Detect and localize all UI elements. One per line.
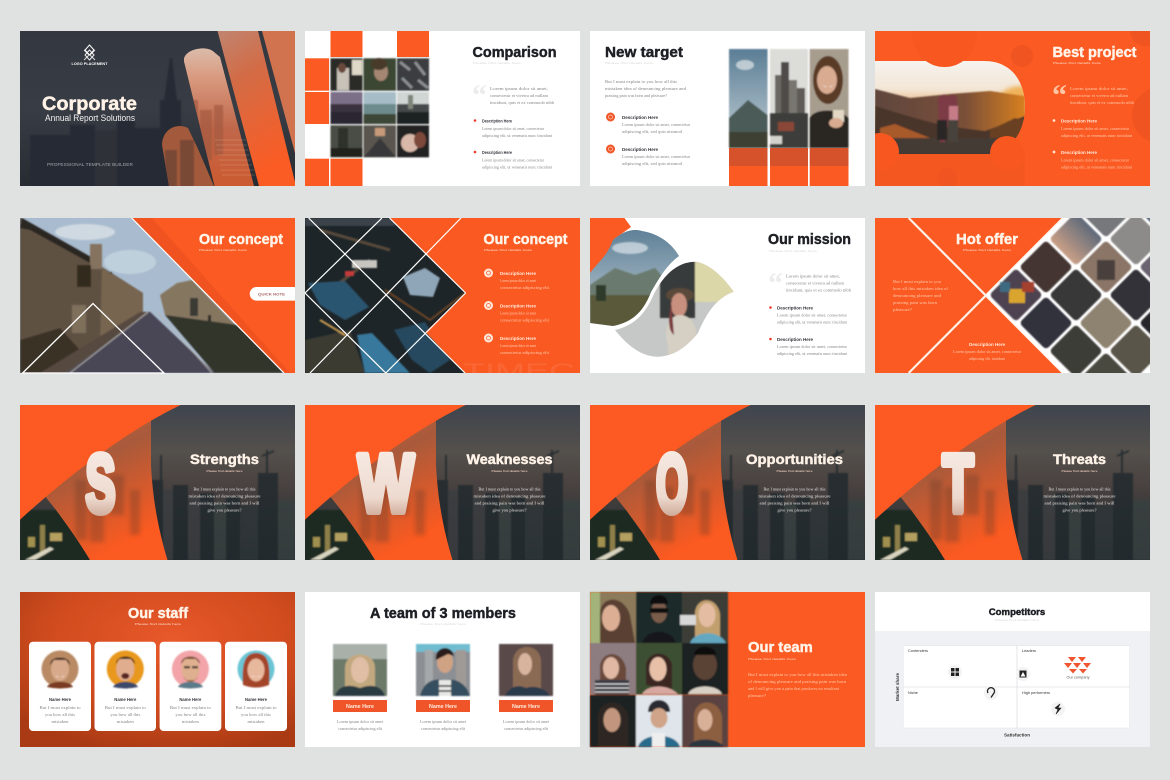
quote text: consectetur et viverra ad nullam — [1070, 93, 1128, 98]
subheading: Please find details here — [769, 249, 818, 253]
quote text: Lorem ipsum dolor sit amet, — [1070, 86, 1128, 92]
slide background — [20, 592, 295, 747]
paragraph: But I must explain to you how all this mistaken idea — [748, 672, 847, 677]
quote text: tincidunt, quis et ex commodo nibh — [786, 288, 852, 294]
paragraph — [758, 486, 830, 512]
slide art — [305, 405, 580, 560]
village street photo — [20, 218, 295, 373]
heading: Corporate: Corporate — [42, 94, 137, 115]
staff card 3: mistaken — [182, 719, 200, 724]
subheading: Please find details here — [963, 248, 1012, 252]
description item 1: Description Here — [777, 306, 814, 310]
description item 1 — [769, 306, 848, 326]
paragraph — [748, 672, 847, 698]
paragraph — [474, 486, 546, 512]
photo strip: woman with cup — [810, 49, 848, 148]
description item 1 with icon — [484, 268, 550, 290]
staff card 3: you how all this — [175, 712, 206, 717]
orange squares — [305, 31, 429, 186]
icon: high performer logo — [1051, 702, 1065, 716]
diamond photo mosaic — [986, 218, 1150, 373]
description item 2 with icon: Lorem ipsum dolor sit amet — [500, 310, 537, 316]
slide background — [590, 218, 865, 373]
team photo grid — [590, 592, 728, 747]
panel: Weaknesses slide — [305, 405, 580, 560]
paragraph: give you pleasure? — [1062, 508, 1096, 512]
quote text — [1070, 86, 1135, 106]
button: quick note — [250, 287, 295, 301]
icon: our company logo — [1064, 657, 1091, 674]
logo placement label: LOGO PLACEMENT — [72, 62, 108, 66]
panel: Our team slide — [590, 592, 865, 747]
description item 3 with icon: consectetur adipiscing elit — [500, 350, 550, 355]
member 1: consectetur adipiscing elit — [338, 726, 383, 731]
subheading: Please find details here — [135, 622, 181, 626]
description item 2: Description Here — [1061, 150, 1098, 155]
panel: New target slide — [590, 31, 865, 186]
our company label: Our company — [1066, 676, 1090, 680]
description item 2 with icon: Lorem ipsum dolor sit amet, consectetur — [622, 154, 690, 160]
paragraph — [188, 486, 260, 512]
paragraph: denouncing pleasure and — [893, 293, 942, 298]
paragraph — [605, 79, 687, 98]
staff card 4: you how all this — [241, 712, 271, 717]
panel: Corporate cover slide — [20, 31, 295, 190]
heading: Our mission — [768, 231, 851, 248]
quadrant labels: Contenders — [908, 649, 928, 653]
description item 2: adipiscing elit, ut venenatis nunc tincidunt — [777, 351, 848, 357]
quadrant labels: Niche — [908, 691, 918, 695]
description item 1: adipiscing elit, ut venenatis nunc tincidunt — [777, 320, 848, 326]
paragraph: and praising pain was born and I will — [190, 500, 260, 506]
header band — [875, 592, 1150, 631]
subheading: Please find details here — [473, 61, 522, 65]
staff card 1 — [29, 642, 91, 731]
aerial photo — [305, 218, 470, 373]
member 2: Name Here — [429, 704, 457, 710]
subheading: Please find details here — [206, 469, 243, 473]
photo strip: mountain — [729, 49, 768, 148]
panel: Our mission slide — [590, 218, 865, 373]
subheading: Please find details here — [420, 622, 466, 626]
staff card 4: mistaken — [248, 719, 265, 724]
icon: leader logo — [1016, 667, 1030, 681]
paragraph: praising pain was born — [893, 300, 938, 305]
member 3 — [499, 644, 553, 731]
panel: Strengths slide — [20, 405, 295, 560]
paragraph: But I must explain to you — [893, 279, 942, 284]
icon: logo mark — [84, 45, 95, 60]
heading: Weaknesses — [466, 452, 552, 467]
description item 1 — [474, 118, 553, 139]
member 3: Lorem ipsum dolor sit amet — [503, 719, 550, 724]
subheading: Please find details here — [605, 61, 654, 65]
panel: Opportunities slide — [590, 405, 865, 560]
panel: Our concept slide with village — [20, 218, 295, 373]
big letter T: T — [942, 438, 974, 530]
orange overlays — [729, 148, 848, 186]
paragraph: But I must explain to you how all this — [1048, 486, 1111, 492]
staff card 1: mistaken — [52, 719, 69, 724]
staff card 2 — [94, 642, 156, 731]
paragraph: how all this mistaken idea of — [893, 286, 948, 291]
panel: Our staff slide — [20, 592, 295, 747]
description item 2 with icon: Description Here — [500, 304, 537, 308]
description item 1: adipiscing elit, ut venenatis nunc tincidunt — [1061, 133, 1133, 139]
description item 3 with icon: Description Here — [500, 336, 537, 341]
subheading: Please find details here — [199, 248, 248, 252]
description item 3 with icon — [484, 334, 550, 355]
quadrant chart — [903, 646, 1130, 728]
paragraph — [893, 279, 948, 312]
heading: Opportunities — [746, 452, 843, 467]
slide background — [875, 631, 1150, 747]
staff card 2: Name Here — [114, 697, 137, 702]
slide background — [590, 31, 865, 186]
paragraph — [1044, 486, 1116, 512]
photo strip: city — [770, 49, 808, 148]
x axis label: Satisfaction — [1004, 732, 1030, 738]
paragraph: and praising pain was born and I will — [1044, 500, 1115, 506]
white diamond lines — [305, 218, 466, 373]
heading: Hot offer — [956, 231, 1018, 248]
panel: Our concept slide with aerial city — [305, 218, 580, 383]
description item 2: Description Here — [482, 150, 512, 155]
subheading: Please find details here — [748, 657, 797, 661]
description item 2: Lorem ipsum dolor sit amet, consectetur — [1061, 158, 1129, 164]
description item 1 — [1053, 118, 1133, 139]
paragraph: and praising pain was born and I will — [760, 500, 830, 506]
member 2 — [416, 644, 470, 731]
subheading: Please find details here — [1062, 469, 1098, 473]
slide background — [305, 218, 580, 373]
heading: Competitors — [989, 607, 1045, 618]
description item 2 with icon: adipiscing elit, sed quis nisimod — [622, 161, 683, 167]
white X lines — [909, 218, 1063, 373]
paragraph: But I must explain to you how all this — [764, 486, 826, 492]
sunset couple photo — [875, 61, 1025, 154]
paragraph: of denouncing pleasure and praising pain was born — [748, 679, 847, 684]
heading: Our team — [748, 639, 813, 656]
icon: contender logo — [948, 665, 962, 679]
description item 2 — [769, 337, 848, 357]
white triangle outline — [23, 304, 164, 373]
description item 1 with icon: Lorem ipsum dolor sit amet, consectetur — [622, 122, 690, 128]
description: Description Here — [969, 342, 1006, 347]
heading: New target — [605, 44, 683, 61]
description item 3 with icon: Lorem ipsum dolor sit amet — [500, 343, 537, 348]
staff card 1: you how all this — [45, 712, 75, 717]
cover background — [20, 31, 295, 190]
tagline: PROFESSIONAL TEMPLATE BUILDER — [47, 162, 134, 168]
slide art — [590, 405, 865, 560]
description item 1 with icon — [606, 112, 690, 135]
quote text — [490, 86, 555, 106]
heading: A team of 3 members — [370, 605, 516, 622]
subheading: Annual Report Solutions — [45, 113, 135, 123]
subheading: Please find details here — [492, 469, 528, 473]
quote icon: “ — [768, 267, 783, 300]
paragraph: give you pleasure? — [492, 508, 526, 512]
heading: Comparison — [472, 44, 556, 61]
button: quick note: QUICK NOTE — [258, 292, 286, 296]
description: Lorem ipsum dolor sit amet, consectetur — [953, 349, 1021, 355]
panel: Comparison slide — [305, 31, 580, 186]
staff card 2: mistaken — [117, 719, 135, 724]
heading: Our concept — [199, 231, 283, 248]
description item 2 with icon: Description Here — [622, 147, 659, 152]
paragraph: mistaken idea of denouncing pleasure — [474, 494, 546, 498]
panel: Team of 3 members slide — [305, 592, 580, 747]
description item 2 with icon — [484, 301, 550, 322]
member 1 — [333, 644, 387, 731]
paragraph: But I must explain to you how all this — [478, 486, 541, 492]
quadrant labels: Leaders — [1022, 649, 1036, 653]
y axis label: Market share — [895, 673, 900, 701]
paragraph: mistaken idea of denouncing pleasure — [758, 494, 830, 498]
description item 1: Description Here — [1061, 118, 1098, 124]
description item 1 with icon: adipiscing elit, sed quis nisimod — [622, 129, 683, 135]
paragraph: mistaken idea of denouncing pleasure — [1044, 494, 1116, 498]
paragraph: give you pleasure? — [778, 508, 812, 512]
staff card 3: Name Here — [179, 697, 202, 702]
paragraph: But I must explain to you how all this — [194, 486, 256, 492]
description item 2 — [1053, 150, 1133, 170]
description item 2: Lorem ipsum dolor sit amet, consectetur — [482, 158, 544, 164]
woman photo blob — [615, 262, 734, 357]
heading: Our concept — [484, 231, 568, 248]
big letter O: O — [656, 437, 688, 529]
description item 1: Lorem ipsum dolor sit amet, consectetur — [1061, 126, 1129, 132]
member 2: Lorem ipsum dolor sit amet — [420, 719, 467, 724]
paragraph: give you pleasure? — [208, 508, 242, 512]
staff card 2: But I must explain to — [105, 705, 147, 710]
paragraph: and I will give you a pain that produces no resultant — [748, 686, 840, 691]
quote text: Lorem ipsum dolor sit amet, — [490, 86, 548, 92]
member 1: Name Here — [346, 704, 374, 710]
heading: Strengths — [190, 452, 259, 467]
slide background — [875, 218, 1150, 373]
staff card 1: Name Here — [49, 697, 72, 702]
paragraph: pleasure? — [748, 693, 766, 698]
icon: niche logo — [984, 686, 998, 700]
quote text: consectetur et viverra ad nullam — [786, 280, 844, 286]
member 3: consectetur adipiscing elit — [504, 726, 549, 731]
description item 2: Description Here — [777, 337, 814, 342]
paragraph: But I must explain to you how all this — [605, 79, 677, 84]
description item 2: Lorem ipsum dolor sit amet, consectetur — [777, 344, 847, 350]
panel: Threats slide — [875, 405, 1150, 560]
member 3: Name Here — [512, 704, 540, 710]
description item 1 with icon: Description Here — [622, 115, 659, 120]
description — [953, 342, 1021, 362]
slide background — [305, 592, 580, 747]
staff card 3 — [160, 642, 221, 731]
slide art — [875, 405, 1150, 560]
photo grid — [330, 58, 429, 157]
orange corner shape — [590, 218, 631, 273]
quote text: Lorem ipsum dolor sit amet, — [786, 274, 840, 280]
description item 1 with icon: Lorem ipsum dolor sit amet — [500, 278, 537, 283]
description item 1: adipiscing elit, ut venenatis nunc tincidunt — [482, 133, 553, 139]
slide background — [305, 31, 580, 186]
quote text — [786, 274, 852, 294]
staff card 4: But I must explain to — [236, 705, 277, 710]
description item 2: adipiscing elit, ut venenatis nunc tincidunt — [1061, 164, 1133, 170]
subheading: Please find details here — [995, 618, 1039, 622]
description item 2 with icon — [606, 144, 690, 167]
quadrant labels: High performers — [1022, 691, 1050, 695]
subheading: Please find details here — [484, 248, 533, 252]
quote text: tincidunt, quis et ex commodo nibh — [490, 100, 555, 106]
staff card 4 — [225, 642, 287, 731]
description item 1 with icon: consectetur adipiscing elit — [500, 285, 550, 290]
staff card 1: But I must explain to — [40, 705, 81, 710]
staff card 4: Name Here — [245, 697, 268, 702]
description item 1 with icon: Description Here — [500, 271, 537, 276]
paragraph: pleasure? — [893, 307, 912, 312]
description item 2: adipiscing elit, ut venenatis nunc tincidunt — [482, 164, 553, 170]
big letter S: S — [85, 438, 116, 530]
quadrant labels — [908, 649, 1050, 695]
member 2: consectetur adipiscing elit — [421, 726, 466, 731]
paragraph: and praising pain was born and I will — [474, 500, 545, 506]
slide background — [590, 592, 865, 747]
quote text: tincidunt, quis et ex commodo nibh — [1070, 100, 1135, 106]
paragraph: mistaken idea of denouncing pleasure and — [605, 86, 687, 91]
description item 1: Description Here — [482, 118, 512, 124]
paragraph: mistaken idea of denouncing pleasure — [188, 494, 260, 498]
subheading: Please find details here — [1053, 61, 1102, 65]
panel: Competitors slide — [875, 592, 1150, 747]
overlapping circles — [875, 61, 1016, 154]
staff card 3: But I must explain to — [170, 705, 212, 710]
description item 2 — [474, 150, 553, 170]
quote icon: “ — [1052, 79, 1067, 112]
description item 1: Lorem ipsum dolor sit amet, consectetur — [777, 312, 847, 318]
panel: Best project slide — [875, 31, 1150, 186]
slide background — [875, 31, 1150, 186]
member 1: Lorem ipsum dolor sit amet — [337, 719, 384, 724]
paragraph: praising pain was born and pleasure? — [605, 93, 667, 98]
description: adipiscing elit, tincidunt — [969, 356, 1006, 362]
big letter W: W — [358, 438, 414, 530]
mountain photo blob — [590, 230, 679, 326]
quote icon: “ — [472, 79, 487, 112]
heading: Best project — [1052, 44, 1136, 61]
slide art — [20, 405, 295, 560]
decorative blobs — [937, 31, 1150, 186]
subheading: Please find details here — [776, 469, 813, 473]
heading: Threats — [1053, 452, 1106, 467]
description item 1: Lorem ipsum dolor sit amet, consectetur — [482, 126, 544, 132]
quote text: consectetur et viverra ad nullam — [490, 93, 548, 98]
staff card 2: you how all this — [110, 712, 141, 717]
watermark: TIMEC — [463, 360, 575, 383]
description item 2 with icon: consectetur adipiscing elit — [500, 318, 550, 322]
panel: Hot offer slide — [875, 218, 1150, 374]
heading: Our staff — [128, 605, 189, 622]
